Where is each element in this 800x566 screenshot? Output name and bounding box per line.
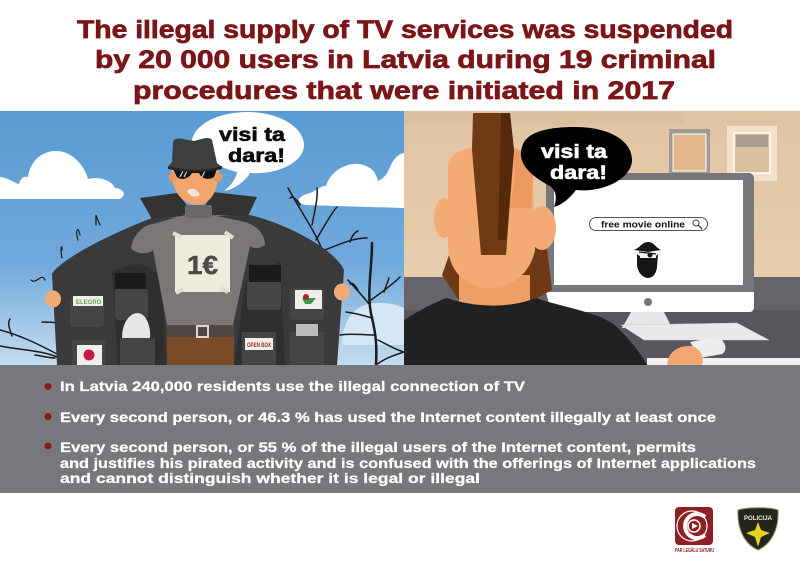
monitor [546, 173, 754, 328]
title [77, 16, 733, 105]
logo: Valsts policija shield [738, 508, 778, 550]
logo: Par legalu saturu [675, 507, 714, 554]
character: coat seller: ELEGRO [76, 300, 102, 306]
open coat [52, 215, 344, 365]
bullet 3: Every second person, or 55 % of the illegal users of the Internet content, permits [60, 439, 696, 455]
black jacket [404, 298, 647, 365]
cloud left [0, 151, 124, 199]
title: by 20 000 users in Latvia during 19 criminal [95, 46, 716, 74]
neck [459, 275, 530, 307]
desk [404, 277, 800, 365]
title: procedures that were initiated in 2017 [133, 77, 675, 105]
sunglasses [173, 169, 217, 179]
bullet 3: and justifies his pirated activity and is confused with the offerings of Internet applications [60, 455, 756, 471]
price sign: 1€ [187, 250, 218, 280]
belt and trousers [167, 325, 234, 365]
sky background [0, 111, 404, 365]
panel: computer user scene [404, 111, 800, 365]
speech bubble: visi ta dara: visi ta [219, 125, 286, 146]
ears [434, 198, 454, 238]
head [171, 165, 219, 205]
bullet 1: In Latvia 240,000 residents use the illegal connection of TV [60, 378, 526, 394]
sweater [131, 215, 265, 325]
person seen from behind [404, 113, 647, 365]
mohawk hair [472, 113, 514, 255]
room wall [404, 111, 800, 365]
character: coat seller [45, 138, 350, 365]
collar [140, 193, 195, 219]
panel: key facts band [0, 365, 800, 493]
fedora hat [168, 138, 222, 171]
desk edge [647, 358, 800, 365]
black speech bubble: visi ta dara: visi ta [541, 142, 608, 163]
bare trees [0, 188, 404, 365]
cloud right [299, 153, 404, 208]
picture frame: left [669, 129, 710, 175]
head [448, 146, 535, 288]
cloud lower right [342, 303, 404, 345]
keyboard [621, 323, 769, 340]
pocket items [115, 273, 146, 289]
bullet 3: and cannot distinguish whether it is legal or illegal [60, 470, 480, 486]
black speech bubble: visi ta dara: dara! [550, 163, 607, 184]
price sign [173, 232, 233, 293]
coat pockets [70, 280, 324, 365]
hands [45, 290, 61, 308]
turtleneck [185, 205, 212, 218]
panel: street seller scene [0, 111, 404, 365]
hand and mouse [667, 337, 725, 365]
speech bubble: visi ta dara: dara! [228, 146, 285, 167]
speech bubble: visi ta dara [192, 112, 304, 191]
inner coat shadow [112, 264, 166, 365]
logo: Par legalu saturu: PAR LEGĀLU SATURU [675, 547, 714, 554]
logo: Valsts policija shield: POLICIJA [744, 516, 773, 522]
icon: bearded pirate [634, 242, 661, 278]
picture frame: right [727, 126, 777, 181]
search bar [590, 218, 708, 230]
character: coat seller: OPEN BOX [247, 343, 271, 349]
bullet 3 [44, 439, 756, 486]
long hair [442, 240, 552, 302]
bullet 2: Every second person, or 46.3 % has used the Internet content illegally at least once [60, 409, 716, 425]
title: The illegal supply of TV services was suspended [77, 16, 733, 44]
search bar: free movie online [601, 220, 685, 230]
black speech bubble: visi ta dara [521, 127, 632, 207]
